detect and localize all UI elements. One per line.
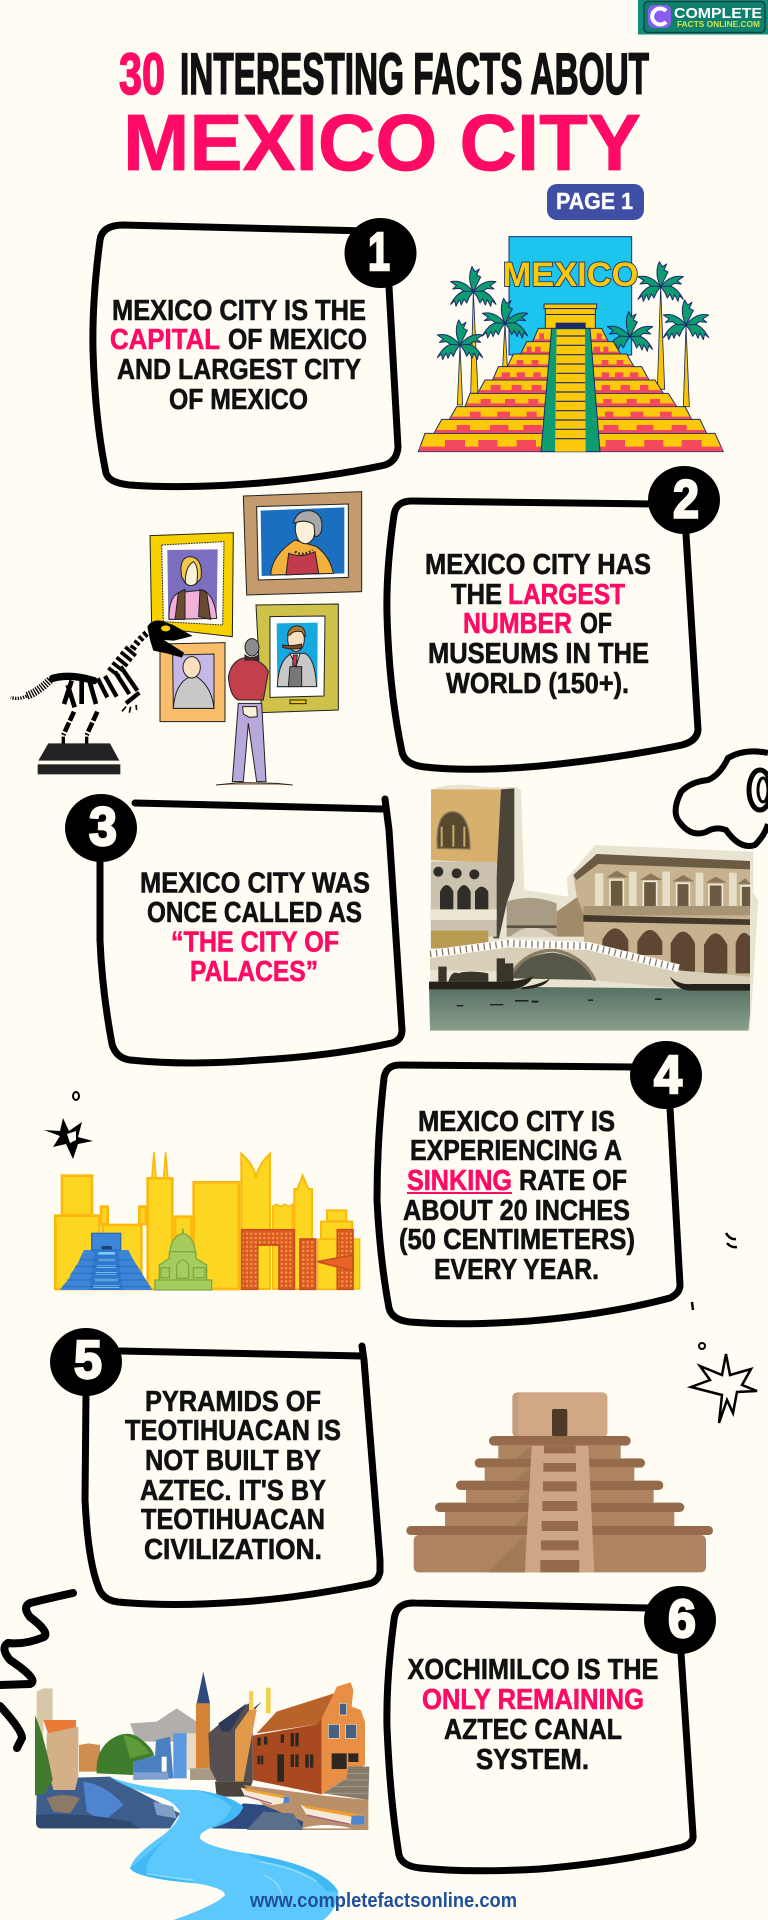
illustration: canal town with river	[35, 1672, 369, 1920]
fact 2 text: THE	[451, 579, 502, 611]
fact 2 text: MUSEUMS IN THE	[428, 638, 649, 670]
fact 5 text: AZTEC. IT'S BY	[140, 1475, 326, 1507]
crowd figures	[438, 958, 513, 982]
fact 2 text: LARGEST	[508, 579, 625, 611]
dinosaur skeleton	[11, 633, 147, 744]
distant rooftops	[130, 1708, 197, 1742]
fact 4 text: RATE OF	[519, 1165, 627, 1197]
doodle: black squiggle	[0, 1593, 73, 1748]
torn paper edges	[430, 785, 758, 1031]
fact 3 text	[140, 868, 370, 988]
fact 3 text: PALACES”	[190, 956, 318, 988]
portrait frame: man with pipe	[256, 604, 338, 713]
fact 6 text: XOCHIMILCO IS THE	[408, 1654, 658, 1686]
gondolas	[429, 976, 750, 991]
arcaded facade	[431, 862, 497, 937]
badge 3: 3	[89, 797, 117, 857]
badge 2: 2	[673, 470, 699, 530]
fact 5 text: CIVILIZATION.	[144, 1534, 322, 1566]
portrait frame: bald man	[160, 643, 225, 722]
MEXICO sign: MEXICO	[503, 256, 638, 294]
title	[119, 42, 649, 187]
title: 30	[119, 42, 165, 107]
badge 5: 5	[74, 1330, 102, 1390]
fact 2 text: OF	[580, 608, 612, 640]
pyramid tiers	[418, 304, 723, 452]
fact 4 text: EXPERIENCING A	[410, 1135, 622, 1167]
water	[429, 986, 750, 1031]
green domed building	[155, 1228, 212, 1290]
fact 3 text: MEXICO CITY WAS	[140, 868, 370, 900]
blue pyramid	[60, 1233, 153, 1290]
fact 1 text: MEXICO CITY IS THE	[112, 295, 366, 327]
badge 6	[644, 1586, 716, 1654]
fact 1 text: OF MEXICO	[228, 324, 367, 356]
logo: Complete Facts Online: COMPLETE	[674, 5, 762, 22]
fact 3 text: ONCE CALLED AS	[147, 897, 362, 929]
pyramid stairs	[525, 1446, 594, 1572]
page label pill	[547, 184, 644, 220]
illustration: Mexican pyramid with palms	[418, 237, 723, 452]
fact 2 text: WORLD (150+).	[446, 668, 629, 700]
fact 5 text: TEOTIHUACAN IS	[125, 1415, 341, 1447]
fact 4 text: MEXICO CITY IS	[418, 1106, 615, 1138]
fact 2 text: NUMBER	[463, 608, 572, 640]
badge 4	[630, 1041, 702, 1109]
fact 6 text: SYSTEM.	[476, 1744, 589, 1776]
photo: historic palace canal	[429, 785, 758, 1031]
fact 5 panel	[50, 1328, 380, 1604]
fact 5 text: NOT BUILT BY	[145, 1445, 321, 1477]
fact 3 text: “THE CITY OF	[171, 926, 339, 958]
fact 4 text: SINKING	[407, 1165, 512, 1197]
illustration: yellow city skyline	[55, 1152, 360, 1290]
fact 4 panel	[377, 1041, 702, 1324]
side wing	[557, 892, 588, 937]
badge 1: 1	[368, 222, 390, 282]
fact 2 text: MEXICO CITY HAS	[425, 549, 651, 581]
fact 1 text: AND LARGEST CITY	[117, 354, 361, 386]
church tower	[190, 1672, 217, 1780]
fact 1 text: CAPITAL	[110, 324, 220, 356]
winding river	[109, 1777, 338, 1920]
gold tower	[431, 789, 501, 863]
portrait frame: woman on purple	[150, 533, 233, 637]
dinosaur head	[38, 620, 193, 774]
palm trees	[437, 262, 709, 407]
illustration: museum gallery	[11, 492, 362, 785]
orange arch and towers	[242, 1230, 353, 1289]
fact 1 text: OF MEXICO	[169, 384, 308, 416]
fact 4 text: EVERY YEAR.	[434, 1254, 599, 1286]
badge 2	[648, 466, 720, 534]
logo: Complete Facts Online: FACTS ONLINE.COM	[677, 19, 760, 29]
dark gabled houses	[208, 1688, 271, 1797]
fact 5 text: TEOTIHUACAN	[141, 1504, 325, 1536]
badge 6: 6	[668, 1589, 696, 1649]
fact 2 text	[425, 549, 651, 700]
visitor viewing portraits	[216, 639, 293, 785]
fact 6 text	[408, 1654, 658, 1776]
fact 3 panel	[65, 794, 402, 1063]
title: MEXICO CITY	[123, 98, 641, 187]
fact 5 text	[125, 1386, 341, 1566]
doodle: black star and dot	[44, 1092, 93, 1159]
portrait frame: woman on blue	[243, 492, 362, 595]
footer website url: www.completefactsonline.com	[249, 1890, 517, 1912]
fact 1 text	[110, 295, 367, 416]
fact 6 panel	[387, 1586, 716, 1871]
page label pill: PAGE 1	[556, 188, 633, 214]
badge 5	[50, 1328, 122, 1396]
left buildings and ivy	[35, 1688, 78, 1796]
trees	[96, 1734, 154, 1775]
central staircase	[541, 328, 600, 452]
fact 1 panel	[93, 218, 416, 487]
fact 2 panel	[387, 466, 720, 769]
boats	[241, 1788, 364, 1828]
fact 4 text: ABOUT 20 INCHES	[403, 1195, 630, 1227]
pyramid ledges	[406, 1436, 713, 1535]
bridge of sighs	[507, 898, 557, 937]
fact 4 text	[399, 1106, 635, 1286]
fact 6 text: AZTEC CANAL	[444, 1714, 622, 1746]
palace body	[573, 855, 750, 977]
doodle marks right of fact 4	[692, 1233, 737, 1310]
skyline buildings	[55, 1152, 360, 1289]
red crenellations	[419, 333, 722, 451]
doodle: outlined star and dot	[691, 1343, 757, 1423]
white stone bridge	[430, 943, 750, 987]
fact 6 text: ONLY REMAINING	[422, 1684, 644, 1716]
badge 4: 4	[654, 1045, 682, 1105]
canal water	[36, 1777, 180, 1828]
badge 3	[65, 794, 137, 862]
logo: Complete Facts Online	[638, 0, 768, 34]
fact 4 text: (50 CENTIMETERS)	[399, 1224, 635, 1256]
stone steps and quay	[212, 1767, 369, 1830]
fact 5 text: PYRAMIDS OF	[145, 1386, 321, 1418]
orange brick building	[253, 1682, 365, 1794]
illustration: brown stepped pyramid	[406, 1392, 713, 1572]
doodle: cloud scribble	[676, 751, 768, 846]
badge 1	[344, 218, 416, 288]
temple top	[512, 1392, 607, 1437]
blue buildings	[133, 1733, 196, 1780]
pyramid body	[414, 1446, 706, 1572]
